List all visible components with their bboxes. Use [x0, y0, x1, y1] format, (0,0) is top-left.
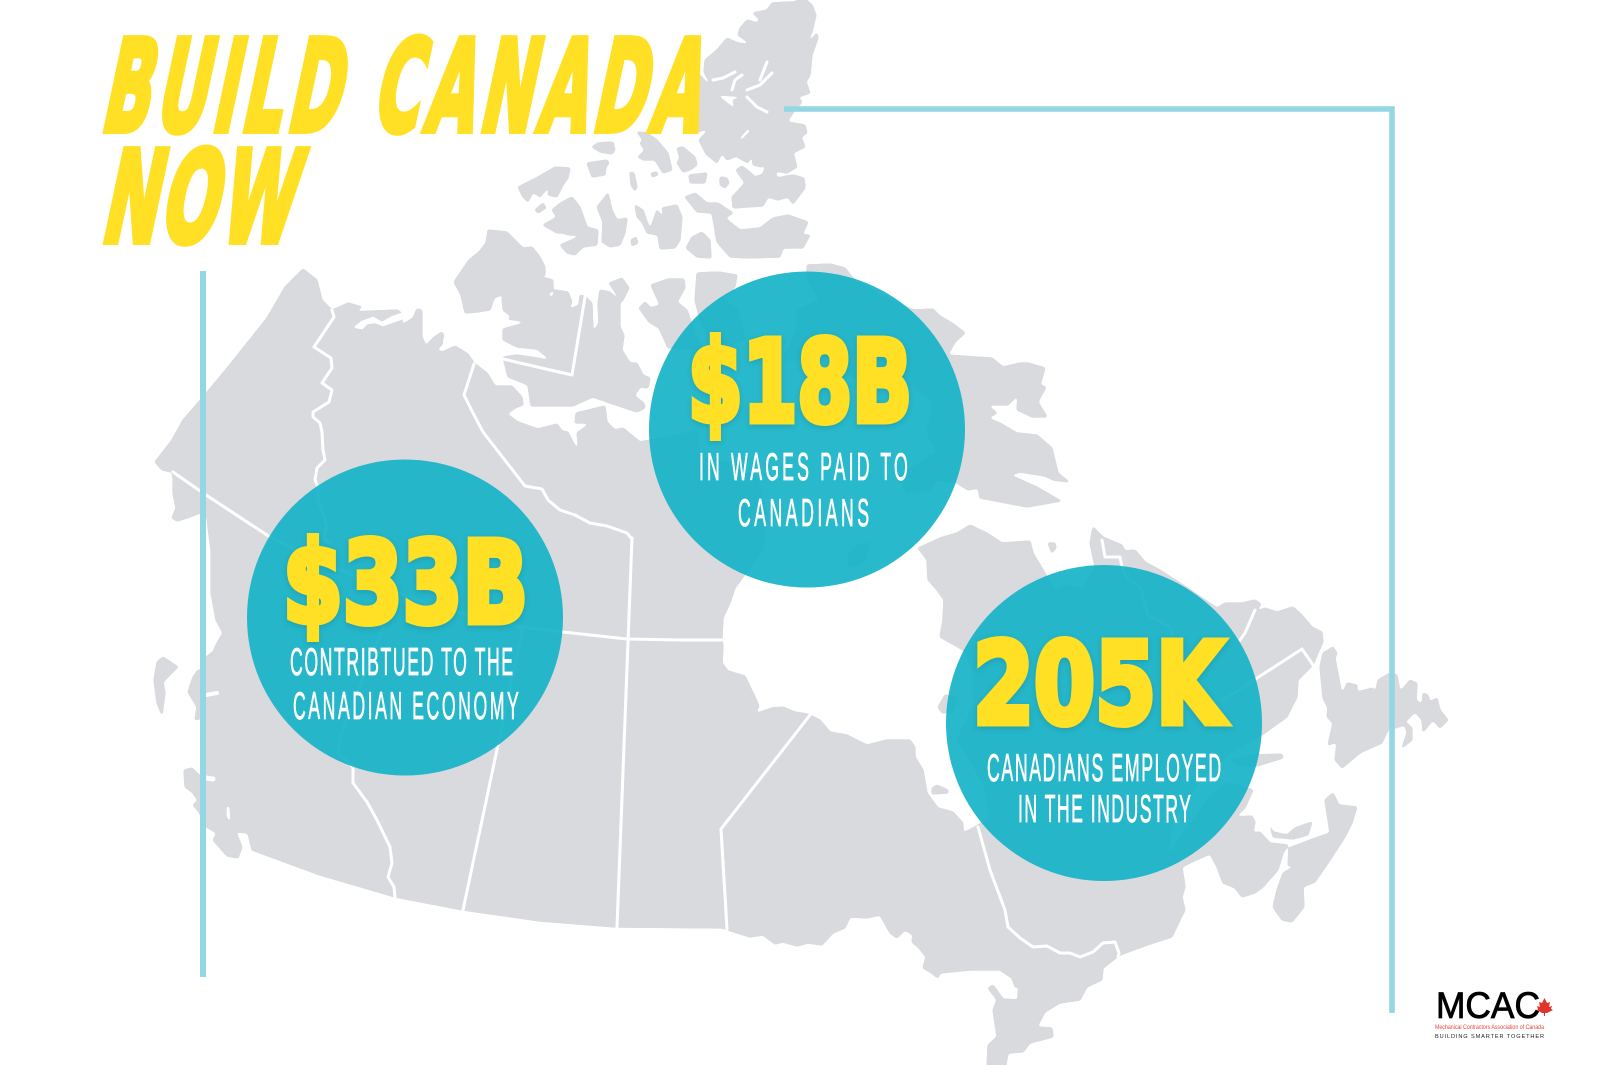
- land: Newfoundland: [1320, 647, 1448, 768]
- land: Ellesmere Island: [704, 0, 818, 208]
- provincial borders and inlets: [173, 62, 1313, 957]
- land: Banks Island: [454, 230, 545, 313]
- callout: $33B contributed: CONTRIBTUED TO THE: [290, 642, 513, 684]
- land: BC lower coastal islands: [184, 768, 206, 812]
- callout: $18B wages: $18B: [688, 318, 912, 448]
- callout: 205K employed: IN THE INDUSTRY: [1018, 789, 1191, 831]
- land: Akimiski Island: [932, 785, 948, 794]
- logo: MCAC: MCAC: [1436, 985, 1540, 1026]
- callout: $18B wages: [649, 272, 965, 588]
- callout: 205K employed: [946, 565, 1262, 881]
- frame line: left vertical: [200, 271, 206, 977]
- land: BC coastal islands: [188, 670, 206, 720]
- land: Somerset Island: [639, 279, 703, 350]
- land: mainland: [155, 269, 1323, 1065]
- callout: 205K employed: CANADIANS EMPLOYED: [987, 748, 1221, 790]
- land: Gaspe and New Brunswick: [1163, 782, 1288, 897]
- land: Belcher Islands: [938, 695, 957, 713]
- frame line: top and right: [784, 109, 1392, 1013]
- land: Nova Scotia: [1273, 793, 1357, 922]
- callout: $18B wages: CANADIANS: [738, 493, 869, 535]
- callout: $33B contributed: [247, 460, 563, 776]
- callout: 205K employed: 205K: [973, 620, 1227, 750]
- callout: $33B contributed: $33B: [283, 519, 528, 649]
- land: Arctic islands group: [518, 132, 810, 258]
- land: Baffin Island east: [783, 264, 1069, 507]
- land: Axel Heiberg Island: [695, 74, 748, 163]
- logo: MCAC: BUILDING SMARTER TOGETHER: [1435, 1034, 1544, 1040]
- land: small Hudson Strait island: [1048, 543, 1056, 553]
- land: Victoria Island: [502, 278, 650, 412]
- land: Prince Edward Island: [1270, 822, 1312, 839]
- title: [92, 14, 722, 272]
- land: Anticosti Island: [1230, 754, 1283, 766]
- title: NOW: [92, 126, 315, 272]
- icon: maple leaf: [1537, 998, 1553, 1016]
- callout: $33B contributed: CANADIAN ECONOMY: [293, 686, 519, 728]
- land: small island near Victoria: [609, 278, 629, 302]
- title: BUILD CANADA: [93, 14, 722, 160]
- land: Baffin Island: [695, 272, 745, 350]
- callout: $18B wages: IN WAGES PAID TO: [699, 447, 908, 489]
- logo: MCAC: Mechanical Contractors Association of Canada: [1435, 1025, 1545, 1031]
- land: Southampton Island: [847, 543, 870, 567]
- logo: MCAC: [1435, 985, 1553, 1040]
- land: Haida Gwaii: [154, 657, 178, 715]
